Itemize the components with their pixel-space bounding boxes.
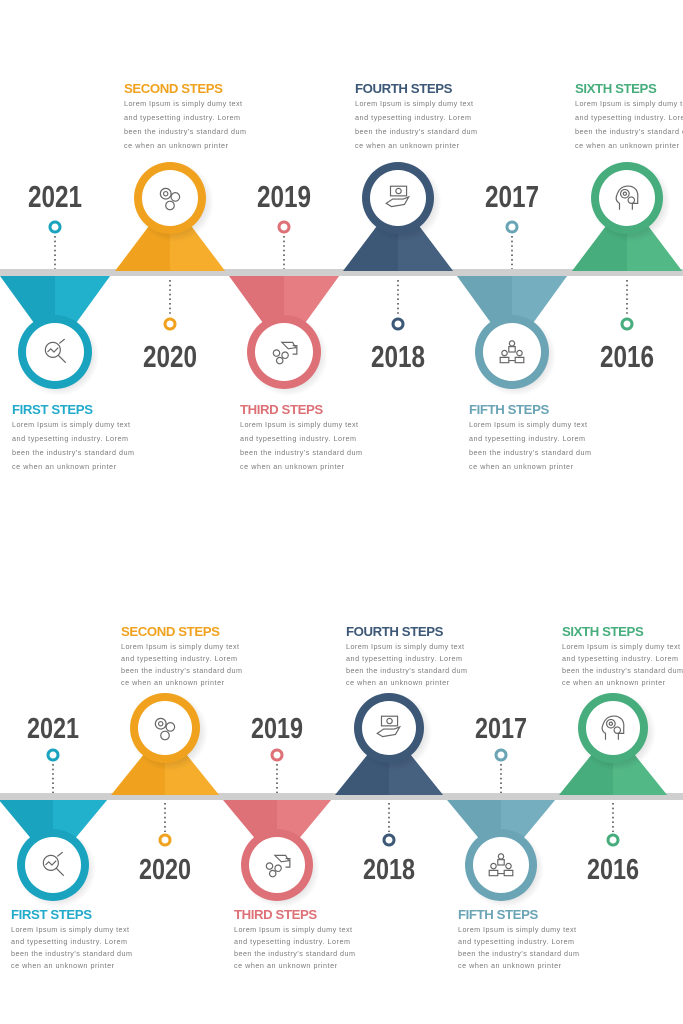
text: second steps: been the industry's standard dum [124,127,246,136]
text: third steps (bottom): Lorem Ipsum is simply dumy text [234,925,352,934]
step 3 down (pink) [229,276,339,396]
text: first steps: FIRST STEPS [12,402,93,417]
years up with markers (bottom): 2017 [475,713,527,745]
years down with markers [143,280,654,374]
text: third steps: been the industry's standard dum [240,448,362,457]
years down with markers (bottom): 2018 [363,854,415,886]
text: fourth steps (bottom): been the industry's standard dum [346,666,467,675]
text: third steps: ce when an unknown printer [240,462,345,471]
years down with markers (bottom): 2020 [139,854,191,886]
panel: top timeline [0,81,683,471]
text: fifth steps (bottom): FIFTH STEPS [458,907,538,922]
text: fourth steps: FOURTH STEPS [355,81,453,96]
text: second steps (bottom): SECOND STEPS [121,624,220,639]
timeline bar top [0,269,683,276]
text: fifth steps [469,402,591,471]
step 2 up (orange) [115,162,225,271]
text: third steps (bottom) [234,907,355,970]
text: sixth steps: ce when an unknown printer [575,141,680,150]
years down with markers (bottom) [139,803,639,886]
text: third steps: Lorem Ipsum is simply dumy text [240,420,358,429]
text: first steps (bottom): been the industry's standard dum [11,949,132,958]
text: fourth steps (bottom): ce when an unknown printer [346,678,450,687]
text: second steps [124,81,246,150]
text: second steps (bottom) [121,624,242,687]
text: sixth steps (bottom): Lorem Ipsum is simply dumy text [562,642,680,651]
text: sixth steps (bottom): been the industry's standard dum [562,666,683,675]
years up with markers: 2021 [28,179,82,214]
text: third steps (bottom): ce when an unknown printer [234,961,338,970]
text: second steps: Lorem Ipsum is simply dumy text [124,99,242,108]
text: second steps: SECOND STEPS [124,81,223,96]
step 1 down (cyan) [0,800,107,908]
text: sixth steps (bottom): and typesetting industry. Lorem [562,654,678,663]
step 6 up (green) [559,693,667,795]
text: third steps [240,402,362,471]
text: sixth steps [575,81,683,150]
text: first steps: been the industry's standard dum [12,448,134,457]
text: second steps: ce when an unknown printer [124,141,229,150]
text: fifth steps: Lorem Ipsum is simply dumy text [469,420,587,429]
panel: bottom timeline [0,624,683,970]
years up with markers: 2019 [257,179,311,214]
step 5 down (teal) [447,800,555,908]
years up with markers (bottom): 2021 [27,713,79,745]
step 6 up (green) [572,162,682,271]
text: first steps: ce when an unknown printer [12,462,117,471]
text: fourth steps: ce when an unknown printer [355,141,460,150]
text: fourth steps [355,81,477,150]
text: second steps (bottom): ce when an unknown printer [121,678,225,687]
text: fourth steps (bottom): Lorem Ipsum is simply dumy text [346,642,464,651]
step 4 up (navy) [343,162,453,271]
text: second steps (bottom): Lorem Ipsum is simply dumy text [121,642,239,651]
years up with markers [28,179,539,269]
text: fifth steps (bottom) [458,907,579,970]
text: fourth steps (bottom) [346,624,467,687]
text: third steps (bottom): been the industry's standard dum [234,949,355,958]
text: first steps (bottom): ce when an unknown printer [11,961,115,970]
years down with markers (bottom): 2016 [587,854,639,886]
text: fifth steps (bottom): Lorem Ipsum is simply dumy text [458,925,576,934]
years up with markers (bottom): 2019 [251,713,303,745]
text: first steps (bottom): FIRST STEPS [11,907,92,922]
timeline bar bottom [0,793,683,800]
text: first steps [12,402,134,471]
text: first steps (bottom) [11,907,132,970]
text: fifth steps (bottom): been the industry's standard dum [458,949,579,958]
years down with markers: 2020 [143,339,197,374]
years up with markers: 2017 [485,179,539,214]
text: second steps: and typesetting industry. Lorem [124,113,240,122]
text: first steps: and typesetting industry. Lorem [12,434,128,443]
text: third steps: and typesetting industry. Lorem [240,434,356,443]
text: fifth steps: been the industry's standard dum [469,448,591,457]
text: third steps (bottom): THIRD STEPS [234,907,317,922]
text: fifth steps: ce when an unknown printer [469,462,574,471]
text: fifth steps (bottom): and typesetting industry. Lorem [458,937,574,946]
text: second steps (bottom): and typesetting industry. Lorem [121,654,237,663]
text: first steps (bottom): and typesetting industry. Lorem [11,937,127,946]
text: fourth steps (bottom): and typesetting industry. Lorem [346,654,462,663]
years down with markers: 2016 [600,339,654,374]
text: fifth steps (bottom): ce when an unknown printer [458,961,562,970]
text: fourth steps (bottom): FOURTH STEPS [346,624,444,639]
text: third steps (bottom): and typesetting industry. Lorem [234,937,350,946]
step 5 down (teal) [457,276,567,396]
step 3 down (pink) [223,800,331,908]
text: first steps (bottom): Lorem Ipsum is simply dumy text [11,925,129,934]
text: sixth steps (bottom) [562,624,683,687]
text: fourth steps: Lorem Ipsum is simply dumy text [355,99,473,108]
text: third steps: THIRD STEPS [240,402,323,417]
years down with markers: 2018 [371,339,425,374]
text: fifth steps: and typesetting industry. Lorem [469,434,585,443]
text: first steps: Lorem Ipsum is simply dumy text [12,420,130,429]
text: second steps (bottom): been the industry's standard dum [121,666,242,675]
step 4 up (navy) [335,693,443,795]
years up with markers (bottom) [27,713,527,793]
text: sixth steps: SIXTH STEPS [575,81,657,96]
text: fifth steps: FIFTH STEPS [469,402,549,417]
text: sixth steps (bottom): SIXTH STEPS [562,624,644,639]
text: fourth steps: and typesetting industry. Lorem [355,113,471,122]
text: sixth steps (bottom): ce when an unknown printer [562,678,666,687]
step 2 up (orange) [111,693,219,795]
text: fourth steps: been the industry's standard dum [355,127,477,136]
step 1 down (cyan) [0,276,110,396]
